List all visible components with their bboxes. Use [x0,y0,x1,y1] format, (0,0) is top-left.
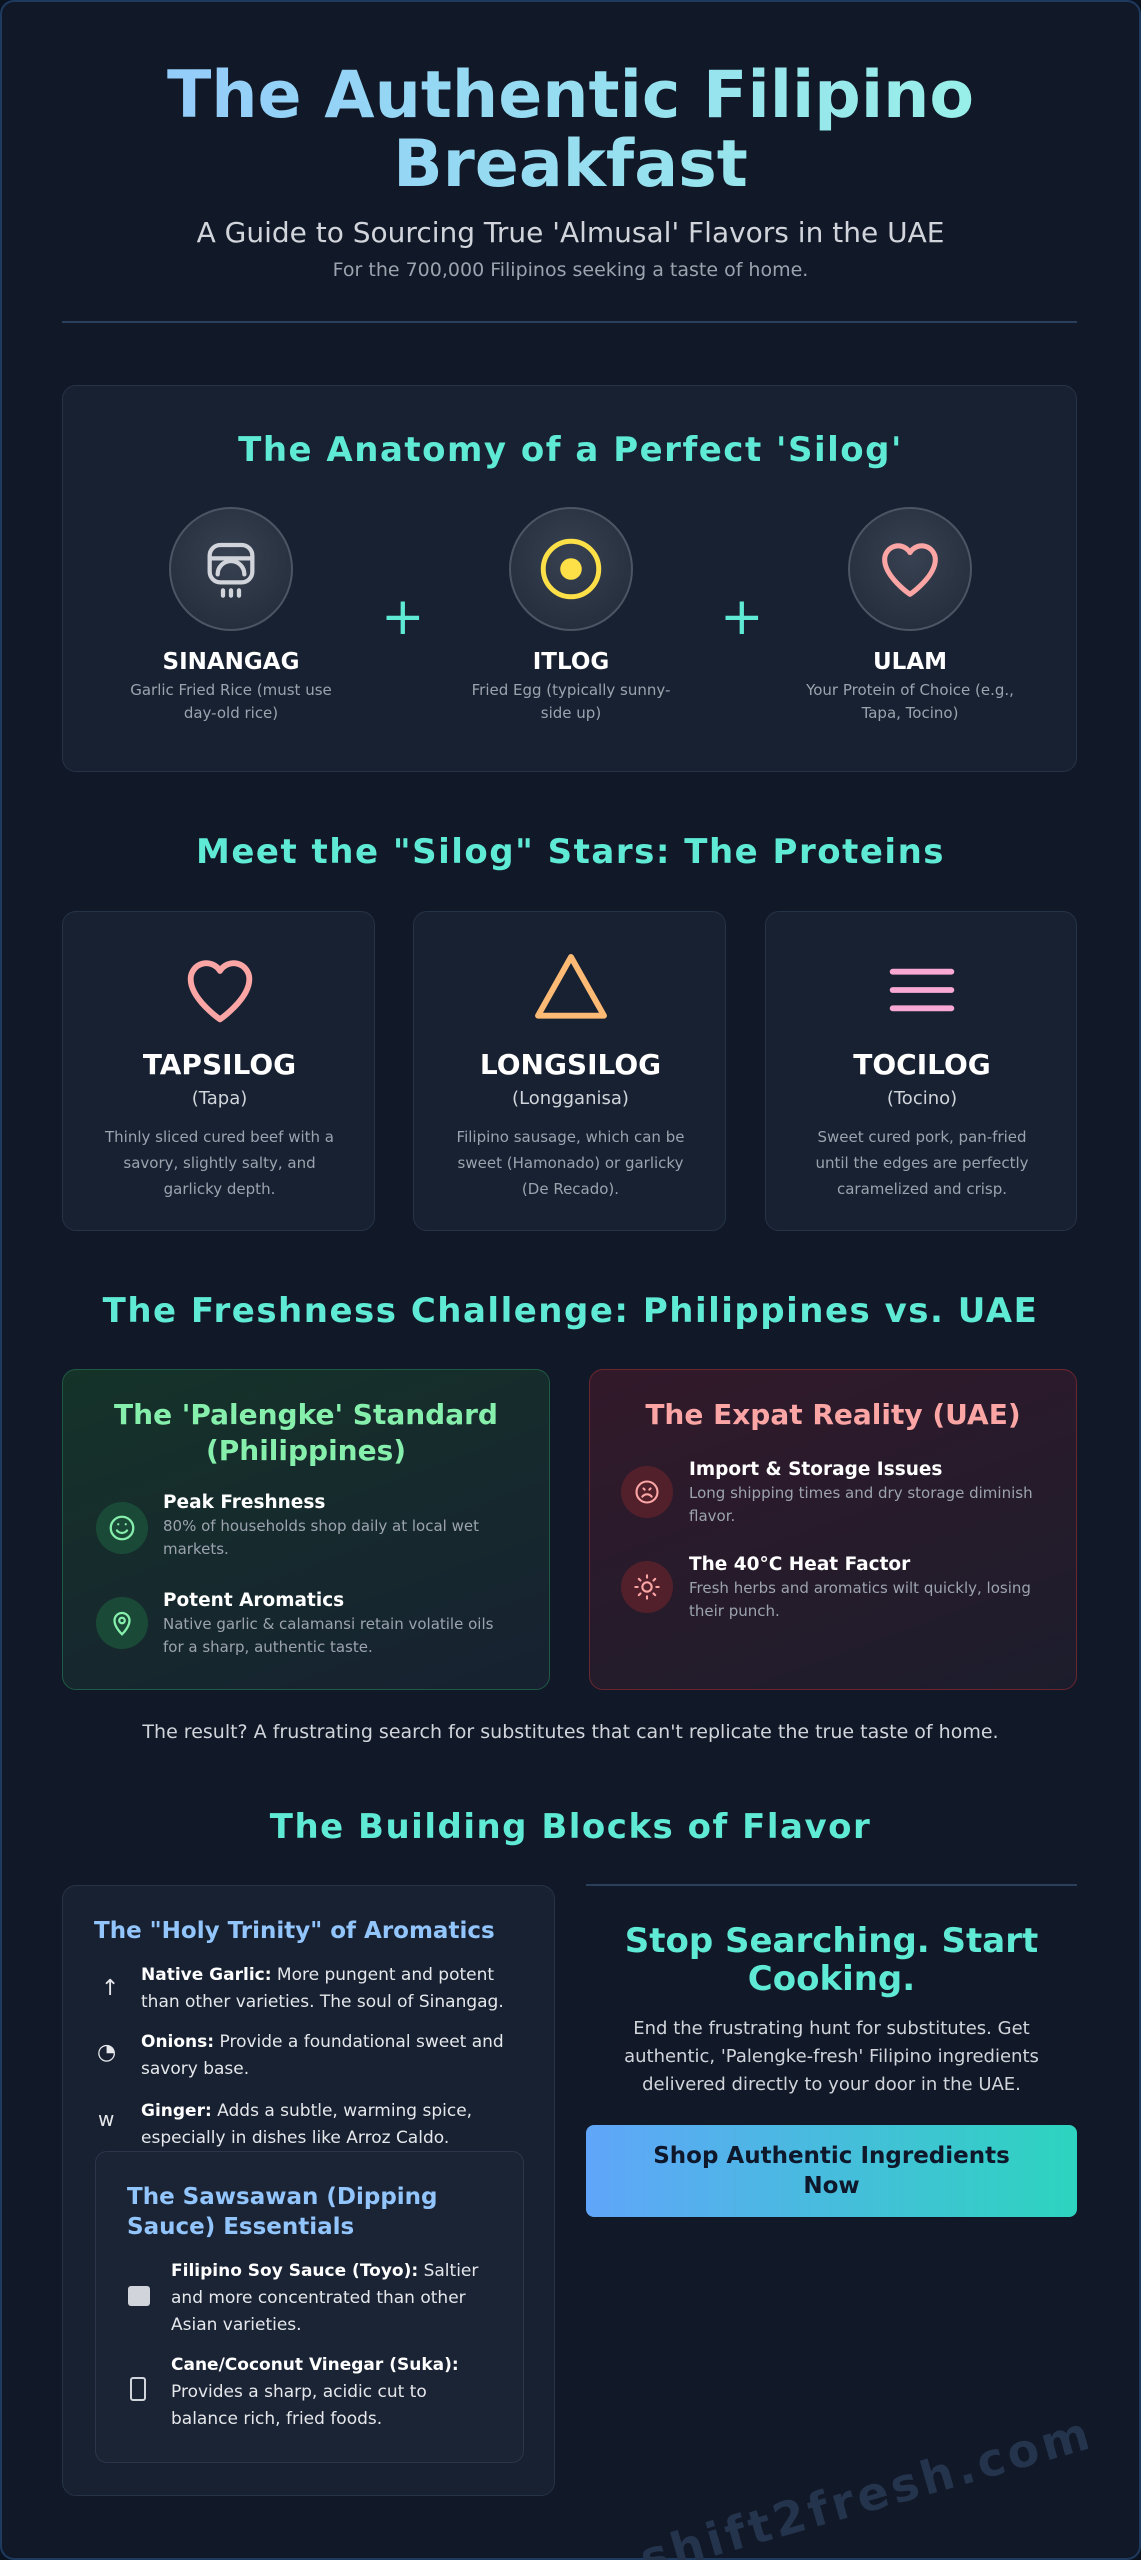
panel: aromatics [62,1885,555,2496]
item: garlic: Native Garlic: More pungent and potent than other varieties. The soul of Sinangag. [141,1965,504,2012]
text: result: The result? A frustrating search for substitutes that can't replicate the true taste of home. [142,1721,999,1743]
item: sinangag: Garlic Fried Rice (must use day-old rice) [130,681,332,722]
plus: + [381,587,426,647]
heading: anatomy: The Anatomy of a Perfect 'Silog' [238,430,903,470]
heading: The Expat Reality (UAE) [645,1398,1021,1431]
item: potent aromatics: Potent Aromatics [163,1590,344,1611]
text: tocilog: (Tocino) [887,1088,957,1109]
text: cta paragraph: End the frustrating hunt for substitutes. Get authentic, 'Palengke-fresh' Filipino ingredients delivered directly to your door in the UAE. [624,2018,1039,2095]
item: heat [689,1554,1031,1620]
icon: egg [509,507,633,631]
icon: heart [848,507,972,631]
icon: onion: ◔ [97,2040,116,2065]
title [0,61,1141,199]
item: sinangag [130,649,332,722]
item: itlog: Fried Egg (typically sunny-side up) [472,681,670,722]
item: potent aromatics: Native garlic & calamansi retain volatile oils for a sharp, authentic taste. [163,1615,493,1656]
plus: + [720,587,765,647]
panel: tocilog [765,911,1077,1231]
button: shop [586,2125,1077,2217]
item: heat: The 40°C Heat Factor [689,1554,910,1575]
item: ulam [806,649,1014,722]
text: tapsilog: (Tapa) [192,1088,247,1109]
panel: palengke standard [62,1369,550,1690]
panel: expat reality [589,1369,1077,1690]
item: peak freshness: 80% of households shop daily at local wet markets. [163,1517,479,1558]
icon: garlic: ↑ [101,1976,119,2001]
icon: ginger: ᴡ [98,2107,114,2131]
text: longsilog: (Longganisa) [512,1088,629,1109]
item: ulam: ULAM [873,649,947,675]
text: tocilog: Sweet cured pork, pan-fried until the edges are perfectly caramelized and crisp. [815,1128,1029,1198]
text: tocilog: TOCILOG [853,1048,991,1081]
title: The Authentic Filipino [167,58,974,133]
text: tapsilog: TAPSILOG [143,1048,296,1081]
button: shop: Shop Authentic Ingredients Now [653,2143,1010,2199]
item: import: Long shipping times and dry storage diminish flavor. [689,1484,1033,1525]
icon: sun [621,1561,673,1613]
item: import [689,1459,1033,1525]
item: suka: Cane/Coconut Vinegar (Suka): Provides a sharp, acidic cut to balance rich, fried foods. [171,2355,459,2429]
text: longsilog: LONGSILOG [480,1048,661,1081]
text: tocilog [815,1048,1029,1198]
heading: building blocks: The Building Blocks of Flavor [270,1807,871,1847]
heading: (Philippines) [206,1434,406,1467]
heading: freshness: The Freshness Challenge: Philippines vs. UAE [103,1291,1038,1331]
title: Breakfast [393,127,748,202]
icon: sad [621,1466,673,1518]
heading: holy trinity: The "Holy Trinity" of Aromatics [94,1918,495,1944]
text: tapsilog [104,1048,334,1198]
text: longsilog [457,1048,684,1198]
panel: sawsawan [95,2151,524,2463]
icon: pin [96,1597,148,1649]
icon: soy [128,2286,150,2306]
icon: lines [890,968,954,1012]
item: peak freshness [163,1492,479,1558]
tagline: For the 700,000 Filipinos seeking a taste of home. [333,259,808,281]
item: potent aromatics [163,1590,493,1656]
item: sinangag: SINANGAG [162,649,299,675]
text: longsilog: Filipino sausage, which can be sweet (Hamonado) or garlicky (De Recado). [457,1128,684,1198]
item: ginger: Ginger: Adds a subtle, warming spice, especially in dishes like Arroz Caldo. [141,2101,472,2148]
text: tapsilog: Thinly sliced cured beef with a savory, slightly salty, and garlicky depth. [105,1128,334,1198]
item: import: Import & Storage Issues [689,1459,942,1480]
heading: stop searching: Stop Searching. Start Cooking. [625,1921,1038,1999]
icon: triangle [535,954,607,1019]
panel: longsilog [413,911,726,1231]
item: onions: Onions: Provide a foundational sweet and savory base. [141,2032,504,2079]
item: ulam: Your Protein of Choice (e.g., Tapa, Tocino) [806,681,1014,722]
item: itlog: ITLOG [533,649,609,675]
subtitle: A Guide to Sourcing True 'Almusal' Flavors in the UAE [197,216,944,249]
heading [114,1398,498,1467]
item: peak freshness: Peak Freshness [163,1492,325,1513]
panel: tapsilog [62,911,375,1231]
item: heat: Fresh herbs and aromatics wilt quickly, losing their punch. [689,1579,1031,1620]
heading: The 'Palengke' Standard [114,1398,498,1431]
icon: rice [169,507,293,631]
heading: sawsawan: The Sawsawan (Dipping Sauce) Essentials [127,2184,438,2240]
item: toyo: Filipino Soy Sauce (Toyo): Saltier and more concentrated than other Asian varieties. [171,2261,478,2335]
icon: bottle [130,2377,146,2401]
item: itlog [472,649,670,722]
heading: proteins: Meet the "Silog" Stars: The Proteins [196,832,945,872]
icon: heart [188,960,252,1022]
panel: anatomy of silog [62,385,1077,772]
icon: smile [96,1502,148,1554]
